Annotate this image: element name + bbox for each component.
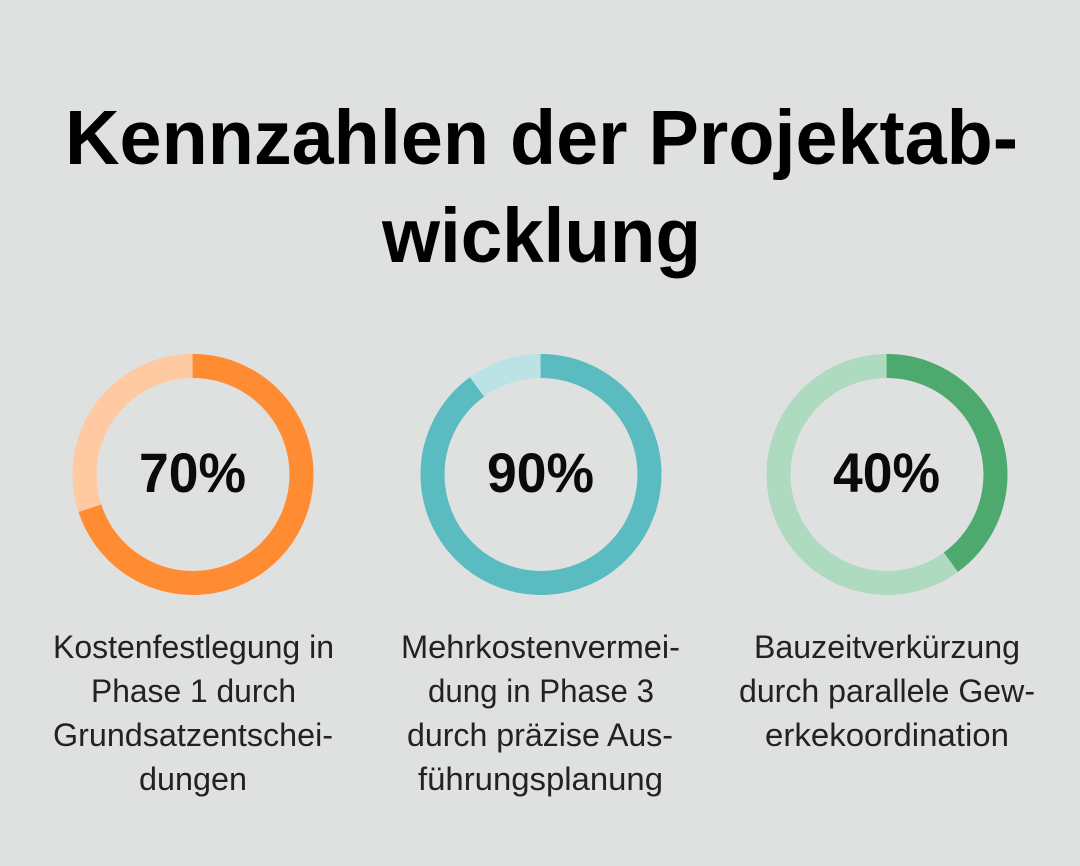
caption: additional cost avoidance: dung in Phase 3 xyxy=(428,673,654,709)
caption: additional cost avoidance xyxy=(401,629,680,797)
donut chart: 70% xyxy=(84,366,302,583)
caption: cost definition: Phase 1 durch xyxy=(91,673,296,709)
value: 70%: 70% xyxy=(139,441,246,504)
caption: additional cost avoidance: Mehrkostenvermei- xyxy=(401,629,680,665)
title: wicklung xyxy=(381,193,701,279)
title: Kennzahlen der Projektab- xyxy=(65,95,1018,181)
donut chart: 90% xyxy=(432,366,650,583)
caption: construction time reduction xyxy=(739,629,1035,753)
caption: additional cost avoidance: durch präzise Aus- xyxy=(407,717,673,753)
caption: construction time reduction: Bauzeitverkürzung xyxy=(754,629,1020,665)
value: 90%: 90% xyxy=(487,441,594,504)
panel: cost definition metric xyxy=(53,366,334,797)
panel: additional cost avoidance metric xyxy=(401,366,680,797)
caption: construction time reduction: durch parallele Gew- xyxy=(739,673,1035,709)
caption: cost definition: Kostenfestlegung in xyxy=(53,629,334,665)
panel: construction time reduction metric xyxy=(739,366,1035,753)
caption: additional cost avoidance: führungsplanung xyxy=(418,761,663,797)
donut chart: 40% xyxy=(778,366,996,583)
caption: cost definition xyxy=(53,629,334,797)
caption: cost definition: dungen xyxy=(139,761,247,797)
caption: cost definition: Grundsatzentschei- xyxy=(53,717,333,753)
caption: construction time reduction: erkekoordination xyxy=(765,717,1009,753)
value: 40%: 40% xyxy=(833,441,940,504)
title xyxy=(65,95,1018,279)
